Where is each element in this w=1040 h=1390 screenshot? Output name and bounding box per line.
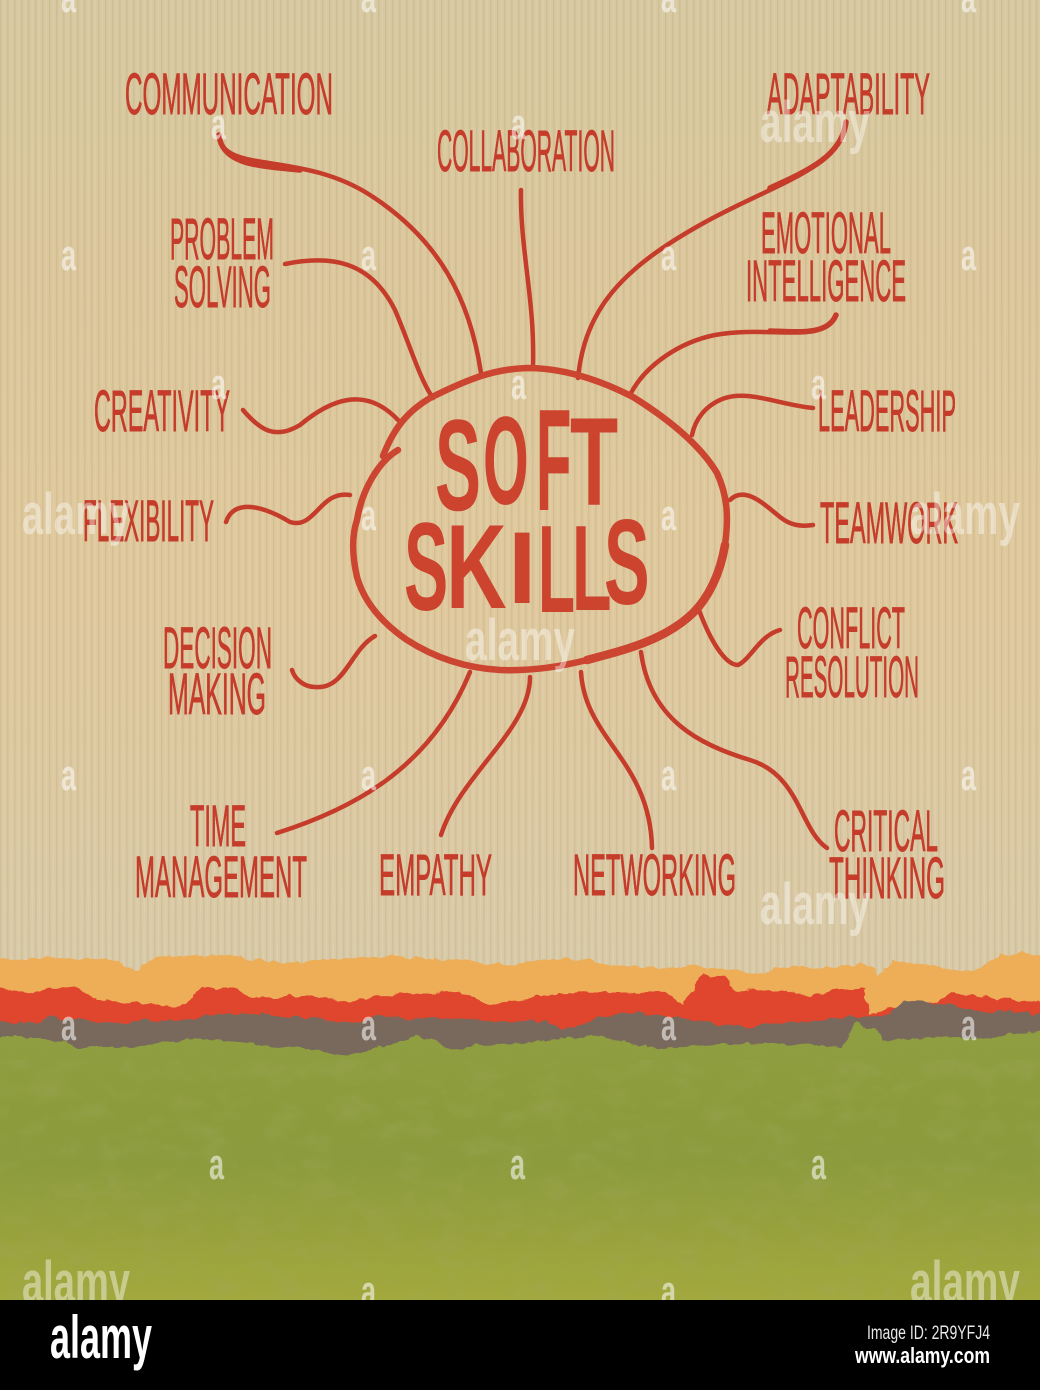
watermarks: a xyxy=(510,1140,525,1189)
watermarks: a xyxy=(61,231,76,280)
watermarks: a xyxy=(811,360,826,409)
title: soft skills: S xyxy=(435,394,481,539)
watermarks: a xyxy=(61,1001,76,1050)
watermarks: a xyxy=(361,751,376,800)
watermarks: alamy xyxy=(22,482,130,547)
footer image id: Image ID: 2R9YFJ4 xyxy=(867,1323,990,1344)
watermarks: alamy xyxy=(465,608,575,673)
footer bar xyxy=(0,1300,1040,1390)
labels: soft skills list: MAKING xyxy=(168,662,266,727)
title: soft skills: L xyxy=(538,500,575,639)
labels: soft skills list: COMMUNICATION xyxy=(125,62,333,127)
labels: soft skills list: CREATIVITY xyxy=(94,379,230,444)
labels: soft skills list: MANAGEMENT xyxy=(135,845,307,910)
title: soft skills: I xyxy=(508,511,536,625)
watermarks: alamy xyxy=(760,872,870,937)
layer: orange paper xyxy=(0,955,1040,1040)
labels: soft skills list: EMPATHY xyxy=(379,843,492,908)
watermarks: a xyxy=(661,231,676,280)
title: soft skills xyxy=(404,380,650,639)
watermarks: a xyxy=(661,751,676,800)
labels: soft skills list: FLEXIBILITY xyxy=(83,489,214,554)
labels: soft skills list: COLLABORATION xyxy=(437,119,615,184)
green paper texture xyxy=(0,1060,1040,1300)
watermarks: a xyxy=(211,100,226,149)
labels: soft skills list: SOLVING xyxy=(174,255,271,320)
title: soft skills: L xyxy=(572,500,611,636)
chart: connector lines xyxy=(219,122,846,848)
title: soft skills: T xyxy=(570,393,618,533)
footer logo: alamy xyxy=(50,1304,152,1371)
layer: green paper xyxy=(0,1023,1040,1320)
watermarks: a xyxy=(511,360,526,409)
watermarks: a xyxy=(661,1267,676,1316)
watermarks: a xyxy=(209,1140,224,1189)
watermarks: a xyxy=(961,1001,976,1050)
title: soft skills: O xyxy=(483,391,529,531)
watermarks: alamy xyxy=(22,1250,130,1315)
labels: soft skills list: DECISION xyxy=(163,616,272,681)
watermarks: a xyxy=(661,1001,676,1050)
labels: soft skills list: PROBLEM xyxy=(170,207,274,272)
title: soft skills: S xyxy=(604,493,650,630)
labels: soft skills list: TIME xyxy=(190,794,246,859)
watermarks: a xyxy=(811,1140,826,1189)
layer: grey paper xyxy=(0,1001,1040,1060)
central circle xyxy=(353,368,727,670)
labels: soft skills list xyxy=(83,62,958,911)
watermarks: alamy xyxy=(760,90,870,155)
watermarks: a xyxy=(661,491,676,540)
watermarks: a xyxy=(361,491,376,540)
title: soft skills: S xyxy=(404,498,448,637)
title: soft skills: K xyxy=(446,499,507,633)
title: soft skills: F xyxy=(536,380,571,542)
panel: torn paper layers xyxy=(0,955,1040,1320)
panel: paper background xyxy=(0,0,1040,1000)
layer: red paper xyxy=(0,973,1040,1040)
watermarks: a xyxy=(211,360,226,409)
watermarks: a xyxy=(961,751,976,800)
watermarks: a xyxy=(361,231,376,280)
watermarks: a xyxy=(511,100,526,149)
watermarks: a xyxy=(361,1267,376,1316)
watermarks: a xyxy=(361,1001,376,1050)
footer url: www.alamy.com xyxy=(854,1343,990,1368)
labels: soft skills list: NETWORKING xyxy=(573,843,736,908)
watermarks: a xyxy=(61,751,76,800)
watermarks: a xyxy=(961,231,976,280)
